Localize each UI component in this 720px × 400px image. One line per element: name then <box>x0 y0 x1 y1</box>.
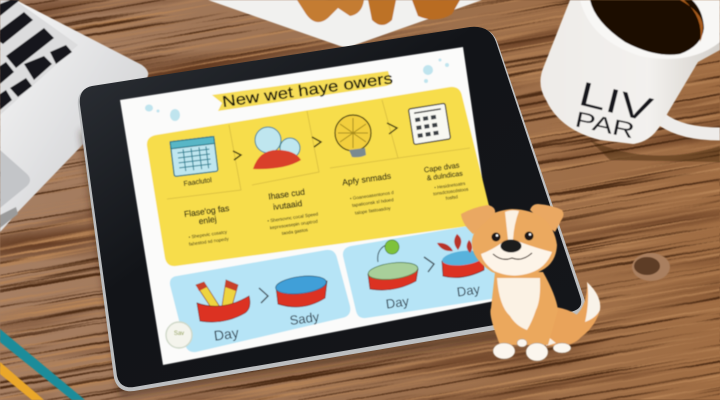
decorative blue splashes <box>145 58 449 121</box>
icon: calendar <box>170 136 218 177</box>
head <box>472 209 557 277</box>
face blaze <box>505 210 519 240</box>
step 1 text: fahestod sd nopedy <box>189 236 230 247</box>
haunch <box>547 307 584 346</box>
step 2 text: taoda gastos <box>281 227 309 236</box>
coffee mug <box>540 0 720 162</box>
step 4 text: • Hesidnetoatrs <box>434 181 466 190</box>
step 1 text: • Shepevic cosatcy <box>188 229 228 240</box>
icon: light bulb <box>335 115 371 157</box>
mouth <box>493 253 532 259</box>
arrow 3 <box>387 123 397 134</box>
tail <box>566 282 600 344</box>
step 4 text <box>423 161 469 201</box>
arrow <box>259 288 268 303</box>
icon: round badge <box>166 322 192 348</box>
mug body <box>540 0 720 144</box>
step 3 text: Apfy snmads <box>342 171 392 187</box>
icon: clipboard checklist <box>408 103 451 145</box>
icon: bowl with bubbles <box>253 127 301 169</box>
chest <box>497 278 540 330</box>
label: day: Day <box>456 281 481 300</box>
pens <box>0 329 85 400</box>
icon: bowl with water <box>275 273 327 307</box>
step 2 text: ivutaaid <box>272 198 303 212</box>
step 3 text <box>342 171 394 215</box>
plate with snacks <box>208 0 482 47</box>
snacks <box>297 0 460 25</box>
laptop <box>0 0 148 232</box>
label: day: Day <box>213 324 240 344</box>
step 1 caption: Faaclutol <box>183 177 213 188</box>
arrow <box>424 257 434 272</box>
icon: round badge: Sav <box>174 331 184 337</box>
step dividers <box>167 100 470 199</box>
yellow steps panel <box>147 87 491 266</box>
label: sady: Sady <box>289 309 321 328</box>
step 2 text: • Shersovnc cocal Speed <box>267 211 319 224</box>
dog mascot <box>461 204 600 361</box>
step 4 text: Cape dvas <box>423 161 460 174</box>
icon: green food bowl <box>367 240 419 290</box>
eyes <box>492 232 534 242</box>
keyboard <box>0 0 78 115</box>
step 3 text: talope fastoasdoy <box>355 205 392 215</box>
right ear <box>530 204 564 232</box>
step 4 text: tonsdctoscdstoos <box>433 186 469 196</box>
coffee <box>590 0 704 55</box>
step 3 text: tapaticonsk sl hdoed <box>352 197 394 208</box>
step 2 text <box>267 186 319 236</box>
step 1 text: enlej <box>198 214 217 226</box>
paws <box>493 339 571 361</box>
step 4 text: & dulndicas <box>426 170 464 182</box>
label: day: Day <box>385 293 410 312</box>
trackpad <box>0 150 30 208</box>
teal pen <box>0 329 85 400</box>
nose <box>500 240 522 252</box>
blue panel: right <box>343 222 498 318</box>
wood knot <box>632 253 670 281</box>
mug handle <box>660 118 720 134</box>
arrow 2 <box>312 137 321 147</box>
muzzle <box>481 240 552 276</box>
icon: bowl with treats <box>196 280 250 322</box>
step 1 text <box>183 203 230 247</box>
mug lettering <box>573 75 656 143</box>
tablet <box>78 27 586 391</box>
mug lettering: PAR <box>573 106 637 143</box>
yellow pencil <box>0 362 44 400</box>
step 2 text: kepresoesepin oruptrod <box>270 219 318 230</box>
arrow 1 <box>233 151 241 160</box>
icon: bowl with leaves <box>437 234 485 278</box>
body <box>490 272 558 345</box>
step 3 text: • Goaneoasentonos d <box>350 190 394 201</box>
tablet shadow <box>80 130 590 398</box>
title banner: New wet haye owers <box>221 70 394 111</box>
step 2 text: Ihase cud <box>268 186 306 202</box>
mug lettering: LIV <box>575 75 656 130</box>
step 4 text: fosfsd <box>445 194 459 201</box>
blue panel: left <box>166 250 350 352</box>
left ear <box>461 205 495 234</box>
tablet screen <box>120 47 500 365</box>
tablet body <box>78 28 586 391</box>
step 1 text: Flase'og fas <box>183 203 230 219</box>
